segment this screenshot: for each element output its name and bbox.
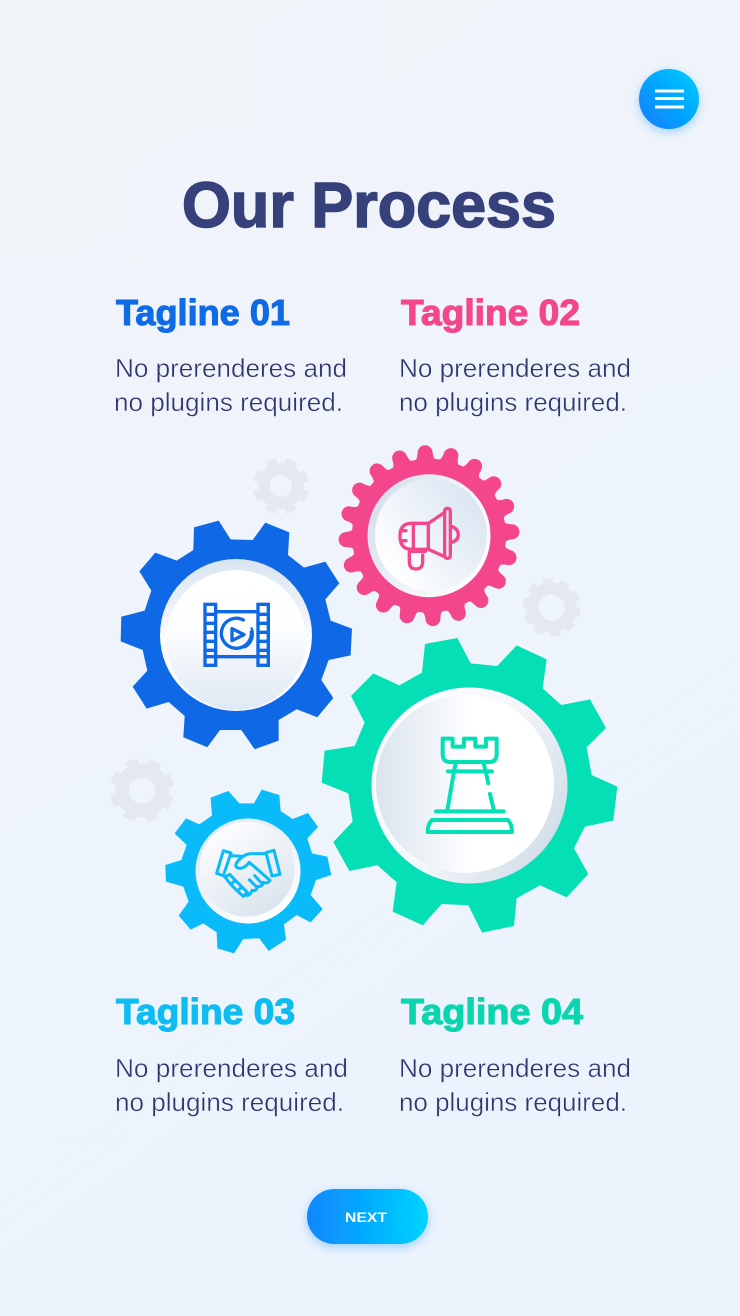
small gray gear left [109, 757, 175, 824]
gear: cyan with handshake [165, 790, 331, 953]
icon: megaphone [400, 508, 458, 569]
tagline 03 heading: Tagline 03 [116, 991, 295, 1032]
tagline 03 block: no plugins required. [115, 1087, 344, 1117]
tagline 01 text: No prerenderes and [115, 353, 347, 383]
tagline 04 block: no plugins required. [399, 1087, 627, 1117]
tagline 04 block [399, 991, 631, 1117]
icon: film play [205, 604, 268, 665]
icon: chess rook [428, 739, 512, 832]
gear: blue with film [121, 521, 352, 749]
tagline 03 block [115, 991, 348, 1117]
tagline 02 block [399, 292, 631, 417]
tagline 02 text: No prerenderes and [399, 353, 631, 383]
gear: green with rook [322, 638, 617, 933]
tagline 04 heading: Tagline 04 [401, 991, 583, 1032]
title: Our Process [182, 169, 556, 241]
tagline 02 block: no plugins required. [399, 387, 627, 417]
tagline 04 text: No prerenderes and [399, 1053, 631, 1083]
tagline 01 heading: Tagline 01 [116, 292, 290, 333]
tagline 02 heading: Tagline 02 [401, 292, 580, 333]
menu button [639, 69, 699, 129]
small gray gear right [526, 582, 577, 633]
icon: handshake [217, 850, 280, 896]
gear: pink with megaphone [334, 441, 524, 630]
small gray gear top [253, 458, 309, 514]
tagline 01 block: no plugins required. [114, 387, 343, 417]
tagline 03 text: No prerenderes and [115, 1053, 348, 1083]
tagline 01 block [114, 292, 347, 417]
next button: NEXT [345, 1209, 387, 1225]
next button [307, 1189, 428, 1244]
